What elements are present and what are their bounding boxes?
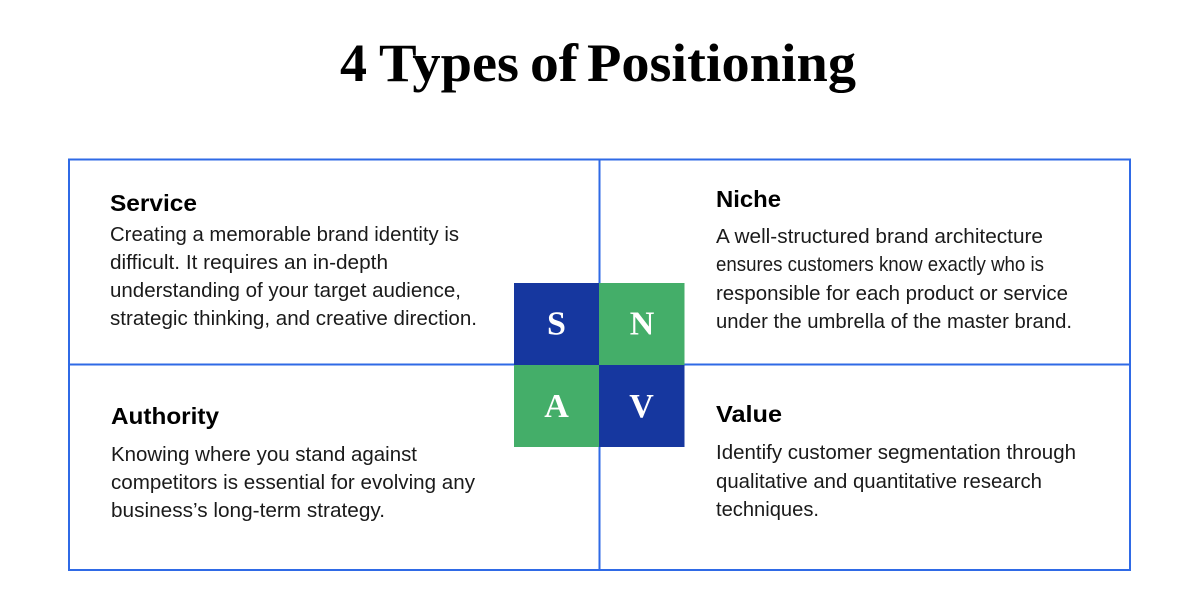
text: service description: Creating a memorable brand identity is xyxy=(110,223,459,246)
title: of xyxy=(530,33,579,93)
text: authority description: Knowing where you stand against xyxy=(111,443,417,466)
tile: S: S xyxy=(547,306,566,342)
tile: S xyxy=(514,283,599,365)
text: value description: techniques. xyxy=(716,498,819,521)
center letter tiles xyxy=(514,283,684,447)
text: value description xyxy=(716,441,1076,521)
panel: service xyxy=(110,190,477,330)
text: niche description: responsible for each product or service xyxy=(716,282,1068,305)
text: niche description: under the umbrella of the master brand. xyxy=(716,310,1072,333)
quadrant grid xyxy=(69,160,1130,570)
tile: V: V xyxy=(629,388,654,425)
text: niche description: ensures customers know exactly who is xyxy=(716,253,1044,276)
tile: A xyxy=(514,365,599,447)
text: niche description xyxy=(716,225,1072,333)
tile: N: N xyxy=(630,306,655,342)
title: Types xyxy=(379,33,519,93)
text: service description: understanding of your target audience, xyxy=(110,279,461,302)
heading: authority: Authority xyxy=(111,403,219,429)
text: authority description xyxy=(111,443,476,522)
panel: niche xyxy=(716,186,1072,333)
text: authority description: competitors is essential for evolving any xyxy=(111,471,476,494)
text: service description: strategic thinking, and creative direction. xyxy=(110,307,477,330)
tile: N xyxy=(599,283,684,365)
heading: value: Value xyxy=(716,401,782,427)
panel: value xyxy=(716,401,1076,521)
title xyxy=(340,33,856,93)
text: service description xyxy=(110,223,477,330)
text: niche description: A well-structured brand architecture xyxy=(716,225,1043,248)
text: service description: difficult. It requires an in-depth xyxy=(110,251,388,274)
text: authority description: business’s long-term strategy. xyxy=(111,499,385,522)
tile: V xyxy=(599,365,684,447)
text: value description: Identify customer segmentation through xyxy=(716,441,1076,464)
panel: authority xyxy=(111,403,476,522)
title: Positioning xyxy=(587,33,856,93)
tile: A: A xyxy=(544,388,569,425)
title: 4 xyxy=(340,33,367,93)
heading: niche: Niche xyxy=(716,186,781,212)
heading: service: Service xyxy=(110,190,197,216)
text: value description: qualitative and quantitative research xyxy=(716,470,1042,493)
